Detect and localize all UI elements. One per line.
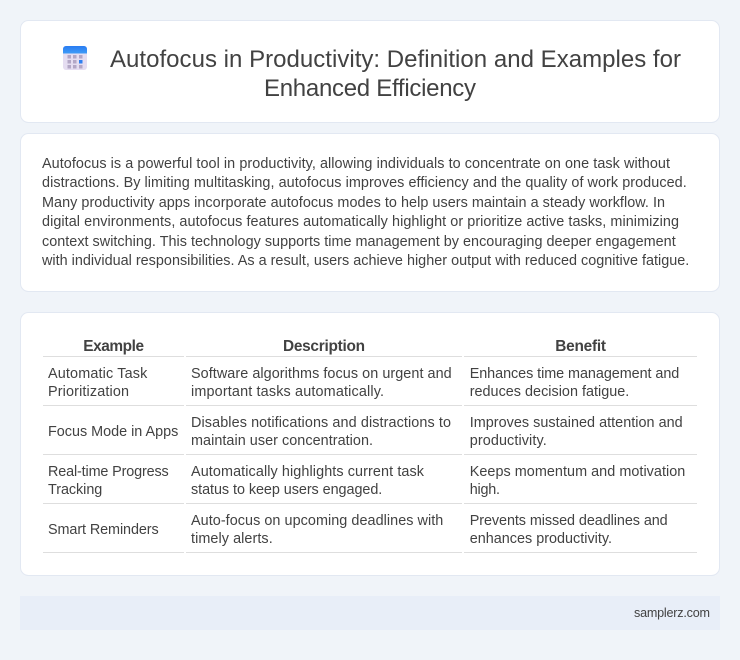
table row: automatic task prioritization: Software algorithms focus on urgent and	[191, 366, 452, 382]
text block: definition: Many productivity apps incorporate autofocus modes to help users maintain a steady workflow. In	[42, 195, 665, 211]
icon: calendar	[63, 46, 87, 70]
table header	[83, 338, 606, 355]
table row: smart reminders: Auto-focus on upcoming deadlines with	[191, 513, 443, 529]
table row: automatic task prioritization: Enhances time management and	[470, 366, 679, 382]
table row: automatic task prioritization: Automatic Task	[48, 366, 148, 382]
table row: smart reminders	[48, 513, 668, 547]
panel: header	[20, 20, 720, 122]
table row: automatic task prioritization: important tasks automatically.	[191, 384, 384, 400]
panel: intro paragraph	[20, 134, 720, 292]
panel: examples table	[20, 312, 720, 576]
footer source text: samplerz.com	[634, 606, 710, 620]
text block: definition: context switching. This technology supports time management by encouraging deeper engagement	[42, 234, 676, 250]
table header: Description	[283, 338, 365, 355]
table row: real-time progress tracking: Automatically highlights current task	[191, 464, 425, 480]
table row: automatic task prioritization	[48, 366, 679, 400]
table row: focus mode in apps: Focus Mode in Apps	[48, 424, 178, 440]
text block: definition: digital environments, autofocus features automatically highlight or prioritize active tasks, minimizing	[42, 214, 679, 230]
text block: definition: with individual responsibilities. As a result, users achieve higher output with reduced cognitive fatigue.	[41, 253, 689, 269]
footer	[20, 596, 720, 630]
table row: real-time progress tracking: status to keep users engaged.	[191, 482, 382, 498]
table row: real-time progress tracking	[48, 464, 685, 498]
title: Autofocus in Productivity: Definition and Examples for	[110, 46, 681, 73]
table row: smart reminders: Prevents missed deadlines and	[470, 513, 668, 529]
text block: definition	[41, 156, 689, 269]
table row: automatic task prioritization: reduces decision fatigue.	[470, 384, 629, 400]
table row: focus mode in apps: Improves sustained attention and	[470, 415, 683, 431]
table row: smart reminders: enhances productivity.	[470, 531, 612, 547]
table row: focus mode in apps: productivity.	[470, 433, 547, 449]
table row: smart reminders: timely alerts.	[191, 531, 273, 547]
table row: real-time progress tracking: Tracking	[48, 482, 102, 498]
table header: Example	[83, 338, 144, 355]
title: Enhanced Efficiency	[264, 75, 476, 102]
table row: real-time progress tracking: high.	[470, 482, 500, 498]
table header: Benefit	[555, 338, 606, 355]
table row: focus mode in apps: maintain user concentration.	[191, 433, 373, 449]
table row: real-time progress tracking: Real-time Progress	[48, 464, 169, 480]
table row: smart reminders: Smart Reminders	[48, 522, 159, 538]
table row: automatic task prioritization: Prioritization	[48, 384, 129, 400]
table row: focus mode in apps: Disables notifications and distractions to	[191, 415, 451, 431]
title	[110, 46, 681, 102]
table row: real-time progress tracking: Keeps momentum and motivation	[470, 464, 685, 480]
text block: definition: Autofocus is a powerful tool in productivity, allowing individuals to concentrate on one task without	[42, 156, 670, 172]
table row: focus mode in apps	[48, 415, 683, 449]
text block: definition: distractions. By limiting multitasking, autofocus improves efficiency and the quality of work produced.	[42, 175, 687, 191]
